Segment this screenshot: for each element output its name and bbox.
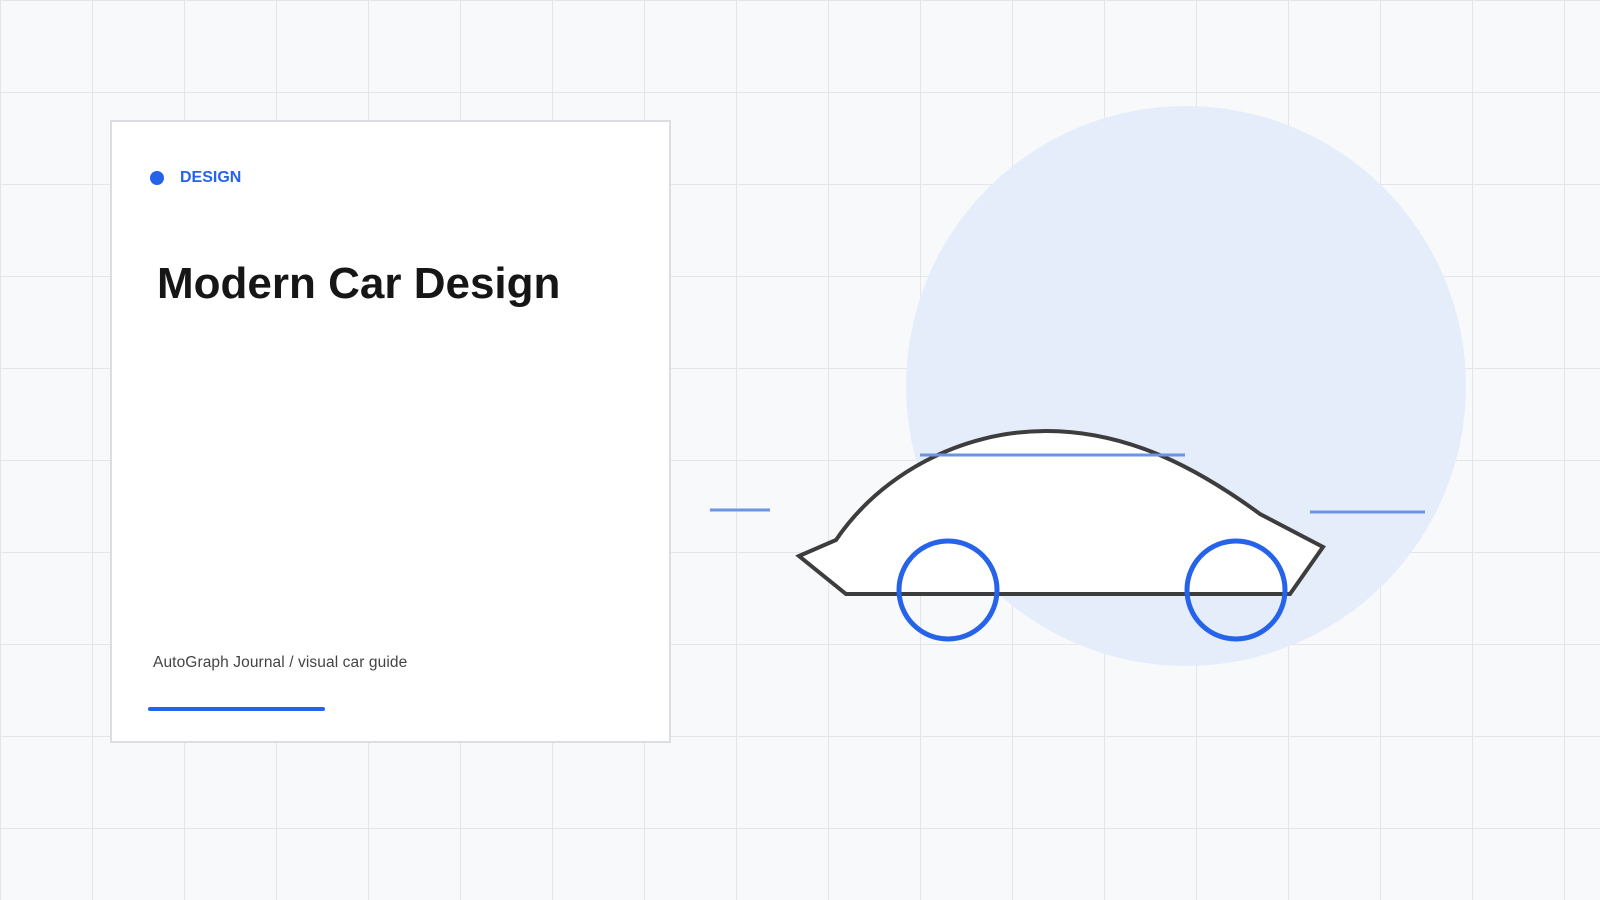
wheel: front xyxy=(899,541,997,639)
accent bar xyxy=(148,707,325,711)
tag: design: DESIGN xyxy=(180,169,241,186)
speed lines xyxy=(710,455,1425,512)
car xyxy=(710,431,1425,639)
car body xyxy=(799,431,1323,594)
footer text: AutoGraph Journal / visual car guide xyxy=(153,654,407,671)
title: Modern Car Design xyxy=(157,259,560,308)
panel: title card xyxy=(110,120,671,743)
tag: design xyxy=(150,169,241,186)
background circle xyxy=(906,106,1466,666)
wheel: rear xyxy=(1187,541,1285,639)
